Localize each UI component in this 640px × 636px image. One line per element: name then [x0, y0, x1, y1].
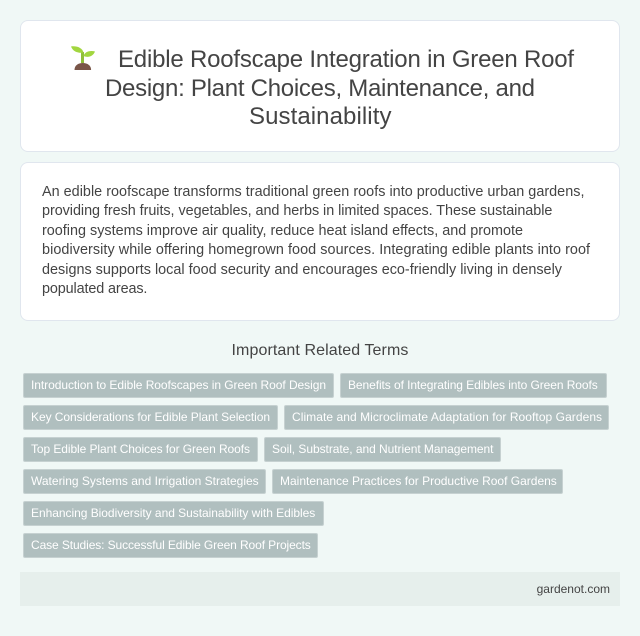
tag: Benefits of Integrating Edibles into Green Roofs	[348, 378, 598, 392]
tag	[284, 405, 609, 430]
heading: related terms: Important Related Terms	[232, 342, 408, 359]
description text: providing fresh fruits, vegetables, and herbs in limited spaces. These sustainable	[42, 203, 552, 219]
tag	[23, 469, 266, 494]
icon: seedling	[71, 46, 95, 70]
title line 3: Sustainability	[249, 103, 392, 130]
tags: related terms	[23, 373, 609, 558]
title line 2: Design: Plant Choices, Maintenance, and	[105, 75, 535, 102]
tag	[23, 437, 258, 462]
tag: Soil, Substrate, and Nutrient Management	[272, 442, 493, 456]
panel: description	[20, 162, 620, 321]
tag: Case Studies: Successful Edible Green Roof Projects	[31, 538, 311, 552]
title line 1: Edible Roofscape Integration in Green Roof	[118, 46, 574, 73]
description text: biodiversity while offering homegrown food sources. Integrating edible plants into roof	[42, 242, 590, 258]
tag	[23, 501, 324, 526]
tag	[23, 373, 334, 398]
tag	[264, 437, 501, 462]
tag: Key Considerations for Edible Plant Selection	[31, 410, 270, 424]
footer bar	[20, 572, 620, 606]
tag	[272, 469, 563, 494]
description text: designs supports local food security and encourages eco-friendly living in densely	[42, 262, 562, 278]
tag	[23, 533, 318, 558]
footer text: gardenot.com	[537, 582, 610, 596]
tag: Enhancing Biodiversity and Sustainability with Edibles	[31, 506, 315, 520]
tag	[23, 405, 278, 430]
tag: Introduction to Edible Roofscapes in Green Roof Design	[31, 378, 326, 392]
description text	[42, 184, 590, 297]
tag: Climate and Microclimate Adaptation for Rooftop Gardens	[292, 410, 602, 424]
description text: roofing systems improve air quality, reduce heat island effects, and promote	[42, 223, 523, 239]
tag	[340, 373, 607, 398]
tag: Watering Systems and Irrigation Strategies	[31, 474, 259, 488]
tag: Maintenance Practices for Productive Roof Gardens	[280, 474, 557, 488]
description text: An edible roofscape transforms traditional green roofs into productive urban gardens,	[42, 184, 584, 200]
panel: title card	[20, 20, 620, 152]
tag: Top Edible Plant Choices for Green Roofs	[31, 442, 250, 456]
description text: populated areas.	[42, 281, 147, 297]
